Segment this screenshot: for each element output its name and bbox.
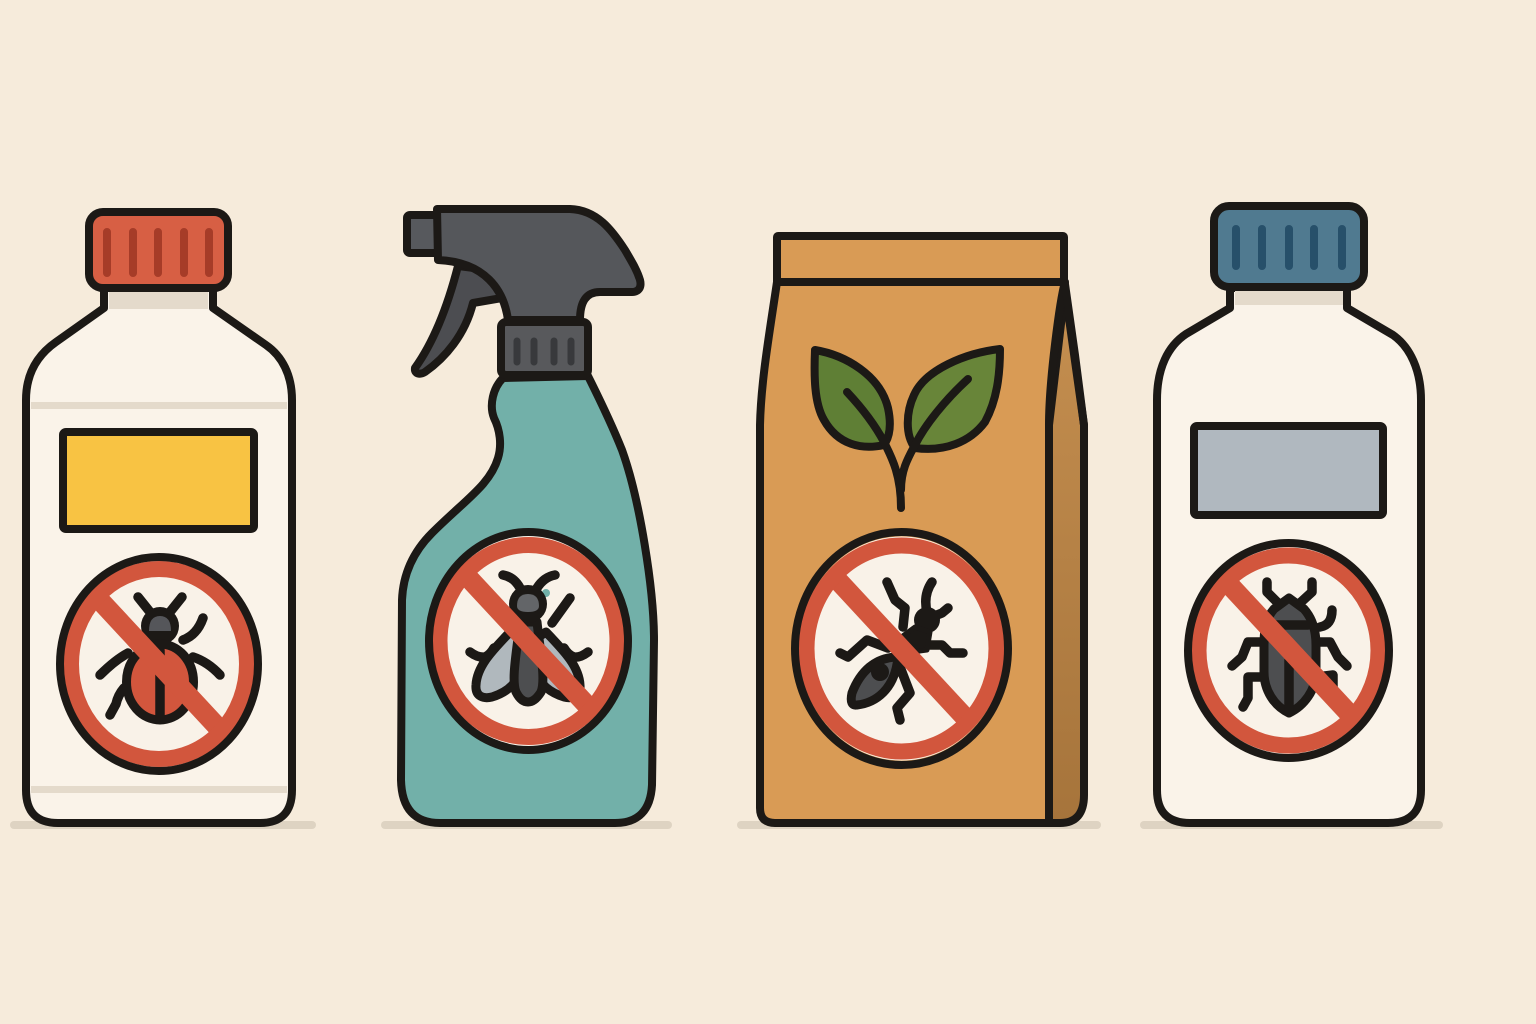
trigger — [415, 266, 502, 374]
bottle with blue cap and beetle prohibition sign — [1140, 206, 1443, 829]
bottle body — [26, 288, 292, 823]
grey label — [1194, 426, 1383, 515]
prohibition sign: ladybug — [60, 557, 258, 771]
bag top band — [777, 236, 1064, 282]
sprayer head — [437, 209, 641, 320]
icon: beetle — [1232, 582, 1347, 713]
prohibition sign: fly — [429, 532, 628, 750]
prohibition sign: ant — [795, 532, 1008, 765]
collar — [501, 322, 588, 375]
nozzle — [407, 215, 439, 253]
bag side gusset — [1049, 290, 1084, 823]
red screw cap — [89, 212, 228, 288]
teal bottle body — [401, 376, 654, 823]
prohibition sign: beetle — [1188, 543, 1389, 758]
spray bottle with fly prohibition sign — [381, 209, 672, 829]
yellow label — [63, 432, 254, 529]
blue screw cap — [1214, 206, 1364, 287]
icon: ant — [840, 582, 963, 720]
bottle body — [1157, 288, 1421, 823]
bag front — [760, 282, 1065, 823]
bottle with red cap and ladybug prohibition sign — [10, 212, 316, 829]
kraft paper bag with leaf and ant prohibition sign — [737, 236, 1101, 829]
icon: ladybug — [100, 597, 220, 720]
icon: leaf sprout — [815, 349, 1000, 508]
icon: fly — [470, 575, 588, 702]
